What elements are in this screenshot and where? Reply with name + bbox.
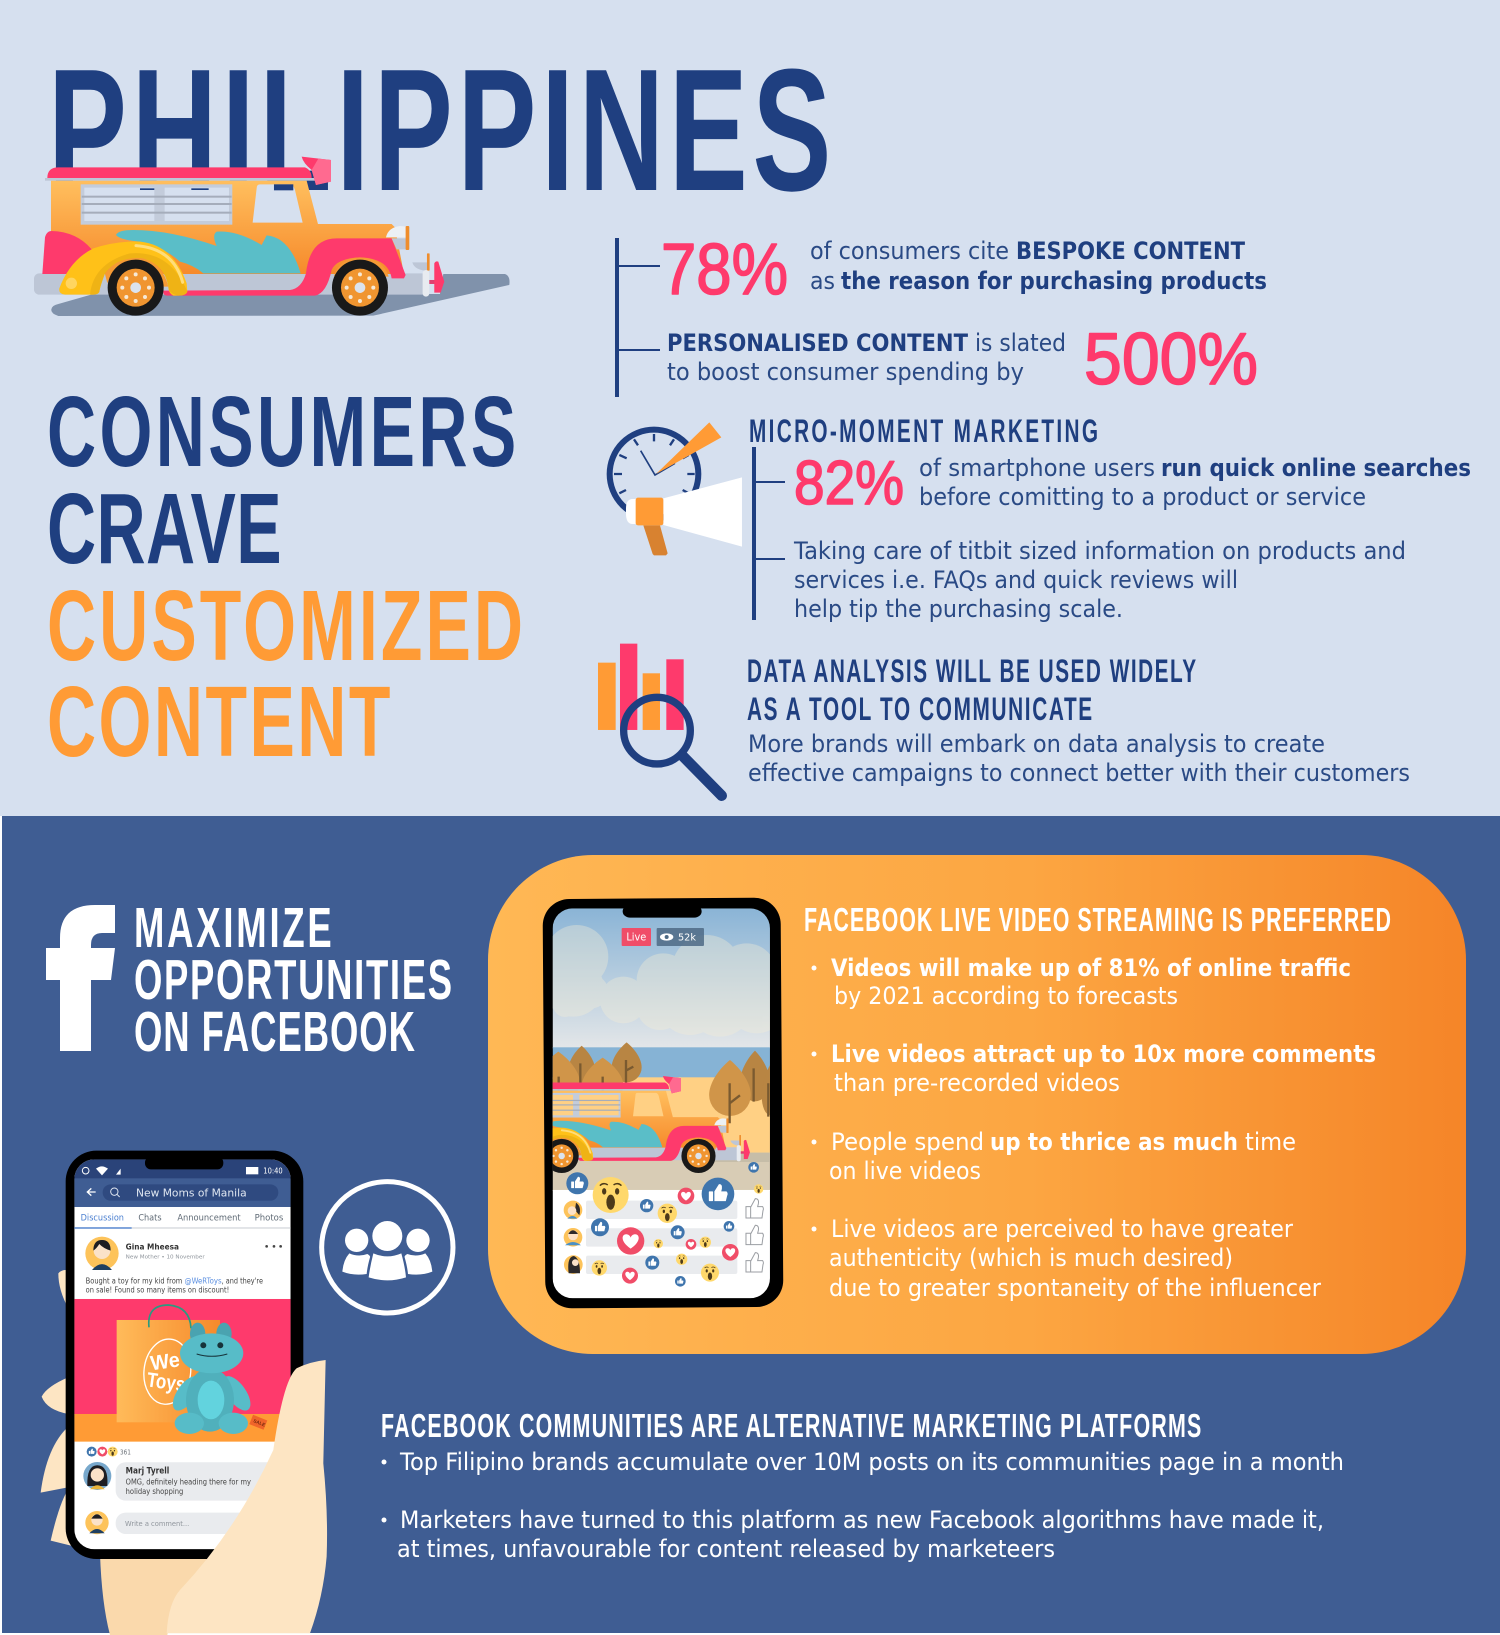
stat: 78 percent bespoke content: the reason for purchasing products	[841, 267, 1267, 295]
post header and text: , and they're	[222, 1276, 263, 1285]
comment text: holiday shopping	[126, 1487, 183, 1496]
stat: 500 percent personalised content: is slated	[975, 329, 1066, 357]
stat: 78 percent bespoke content: of consumers cite	[810, 237, 1009, 265]
tabs: Discussion	[81, 1214, 124, 1224]
tabs: Announcement	[177, 1214, 241, 1224]
text: facebook communities: at times, unfavourable for content released by marketeers	[397, 1535, 1055, 1563]
status bar	[82, 1166, 283, 1176]
comment text: OMG, definitely heading there for my	[126, 1478, 251, 1487]
post image: we and toys: Toys	[145, 1368, 187, 1397]
status bar: 10:40	[263, 1167, 283, 1176]
text: data analysis: effective campaigns to connect better with their customers	[748, 759, 1410, 787]
badge: viewers: 52k	[678, 933, 696, 944]
stat: 82 percent smartphone users: 82%	[794, 449, 904, 518]
list: live video facts: People spend	[831, 1128, 984, 1156]
stat: 82 percent smartphone users: run quick online searches	[1161, 454, 1471, 482]
title: Philippines: PHILIPPINES	[48, 32, 831, 227]
list: live video facts: than pre-recorded videos	[834, 1069, 1120, 1097]
text: facebook communities: Marketers have turned to this platform as new Facebook algorithms have made it,	[400, 1506, 1324, 1534]
stat: 78 percent bespoke content	[661, 230, 1267, 310]
search bar	[87, 1187, 247, 1200]
bottom background panel	[2, 816, 1500, 1633]
post image: we and toys: We	[149, 1348, 181, 1375]
heading: maximize opportunities on facebook: OPPORTUNITIES	[134, 949, 452, 1012]
headline: consumers crave customized content: CONTENT	[47, 667, 390, 778]
tabs	[74, 1214, 291, 1229]
top background panel	[0, 0, 1500, 816]
comment text: 361	[120, 1449, 131, 1457]
hand: back fingers	[41, 1270, 75, 1547]
list: live video facts: authenticity (which is much desired)	[829, 1244, 1233, 1272]
heading: maximize opportunities on facebook: MAXIMIZE	[134, 897, 332, 960]
bracket: micro-moment	[752, 447, 785, 620]
heading: micro-moment marketing: MICRO-MOMENT MARKETING	[749, 414, 1098, 449]
bracket: personalised content stats	[615, 238, 660, 397]
heading: live video streaming: FACEBOOK LIVE VIDEO STREAMING IS PREFERRED	[804, 901, 1391, 938]
post header and text: on sale! Found so many items on discount!	[86, 1286, 229, 1295]
list: live video facts: up to thrice as much	[990, 1128, 1238, 1156]
tabs: Photos	[255, 1214, 284, 1224]
text: facebook communities: Top Filipino brands accumulate over 10M posts on its communities page in a month	[399, 1448, 1344, 1476]
heading: maximize opportunities on facebook: ON FACEBOOK	[134, 1001, 415, 1064]
list: live video facts: Videos will make up of 81% of online traffic	[831, 954, 1351, 982]
text: titbit information: help tip the purchasing scale.	[794, 595, 1123, 623]
tabs: Chats	[138, 1214, 162, 1224]
text: data analysis	[747, 654, 1410, 787]
post header and text: @WeRToys	[185, 1276, 222, 1285]
text: data analysis: AS A TOOL TO COMMUNICATE	[747, 692, 1092, 727]
text: facebook communities	[381, 1407, 1344, 1563]
headline: consumers crave customized content	[47, 377, 523, 778]
badge: live: Live	[626, 932, 646, 944]
comment text: Marj Tyrell	[126, 1467, 169, 1477]
text: titbit information: Taking care of titbit sized information on products and	[793, 537, 1406, 565]
headline: consumers crave customized content: CUSTOMIZED	[47, 571, 523, 682]
icon: bar chart and magnifier	[598, 644, 722, 796]
comment text: Write a comment...	[125, 1519, 189, 1528]
phone and hand: facebook group feed	[41, 1151, 327, 1635]
icon: community group	[322, 1182, 453, 1313]
post header and text: Bought a toy for my kid from	[86, 1276, 182, 1285]
list: live video facts: Live videos are perceived to have greater	[831, 1215, 1293, 1243]
headline: consumers crave customized content: CONSUMERS	[47, 377, 516, 488]
post header and text: Gina Mheesa	[126, 1241, 179, 1251]
headline: consumers crave customized content: CRAVE	[47, 474, 282, 585]
icon: clock and megaphone	[610, 422, 742, 555]
stat: 82 percent smartphone users: of smartphone users	[919, 454, 1155, 482]
stat: 82 percent smartphone users: before comitting to a product or service	[919, 483, 1366, 511]
illustration: jeepney	[34, 157, 510, 316]
panel: facebook live	[488, 855, 1466, 1354]
list: live video facts	[812, 954, 1376, 1302]
search bar: New Moms of Manila	[136, 1187, 247, 1200]
post header and text	[85, 1237, 282, 1295]
stat: 500 percent personalised content: 500%	[1084, 319, 1258, 400]
comment text	[120, 1449, 251, 1528]
stat: 78 percent bespoke content: BESPOKE CONTENT	[1016, 237, 1246, 265]
list: live video facts: time	[1245, 1128, 1296, 1156]
stat: 78 percent bespoke content: as	[810, 267, 835, 295]
hand: thumb	[167, 1360, 327, 1633]
text: titbit information: services i.e. FAQs and quick reviews will	[794, 566, 1238, 594]
list: live video facts: by 2021 according to forecasts	[834, 982, 1178, 1010]
phone: live video	[542, 898, 784, 1308]
stat: 500 percent personalised content: to boost consumer spending by	[667, 358, 1024, 386]
badge: viewers	[657, 928, 704, 946]
text: data analysis: DATA ANALYSIS WILL BE USED WIDELY	[747, 654, 1196, 689]
stat: 500 percent personalised content: PERSONALISED CONTENT	[667, 329, 969, 357]
stat: 500 percent personalised content	[667, 319, 1258, 400]
post image: we and toys	[74, 1299, 291, 1442]
badge: live	[622, 928, 651, 946]
list: live video facts: due to greater spontaneity of the influencer	[829, 1274, 1321, 1302]
stat: 82 percent smartphone users	[794, 449, 1471, 518]
list: live video facts: on live videos	[829, 1157, 981, 1185]
stat: 78 percent bespoke content: 78%	[661, 230, 788, 310]
text: titbit information	[793, 537, 1406, 623]
icon: facebook f	[46, 905, 115, 1051]
text: data analysis: More brands will embark on data analysis to create	[748, 730, 1325, 758]
post header and text: New Mother • 10 November	[126, 1254, 205, 1260]
text: facebook communities: FACEBOOK COMMUNITIES ARE ALTERNATIVE MARKETING PLATFORMS	[381, 1407, 1201, 1444]
list: live video facts: Live videos attract up to 10x more comments	[831, 1040, 1376, 1068]
comments	[83, 1446, 268, 1534]
heading: maximize opportunities on facebook	[134, 897, 452, 1064]
post image: we and toys: SALE	[253, 1418, 266, 1428]
